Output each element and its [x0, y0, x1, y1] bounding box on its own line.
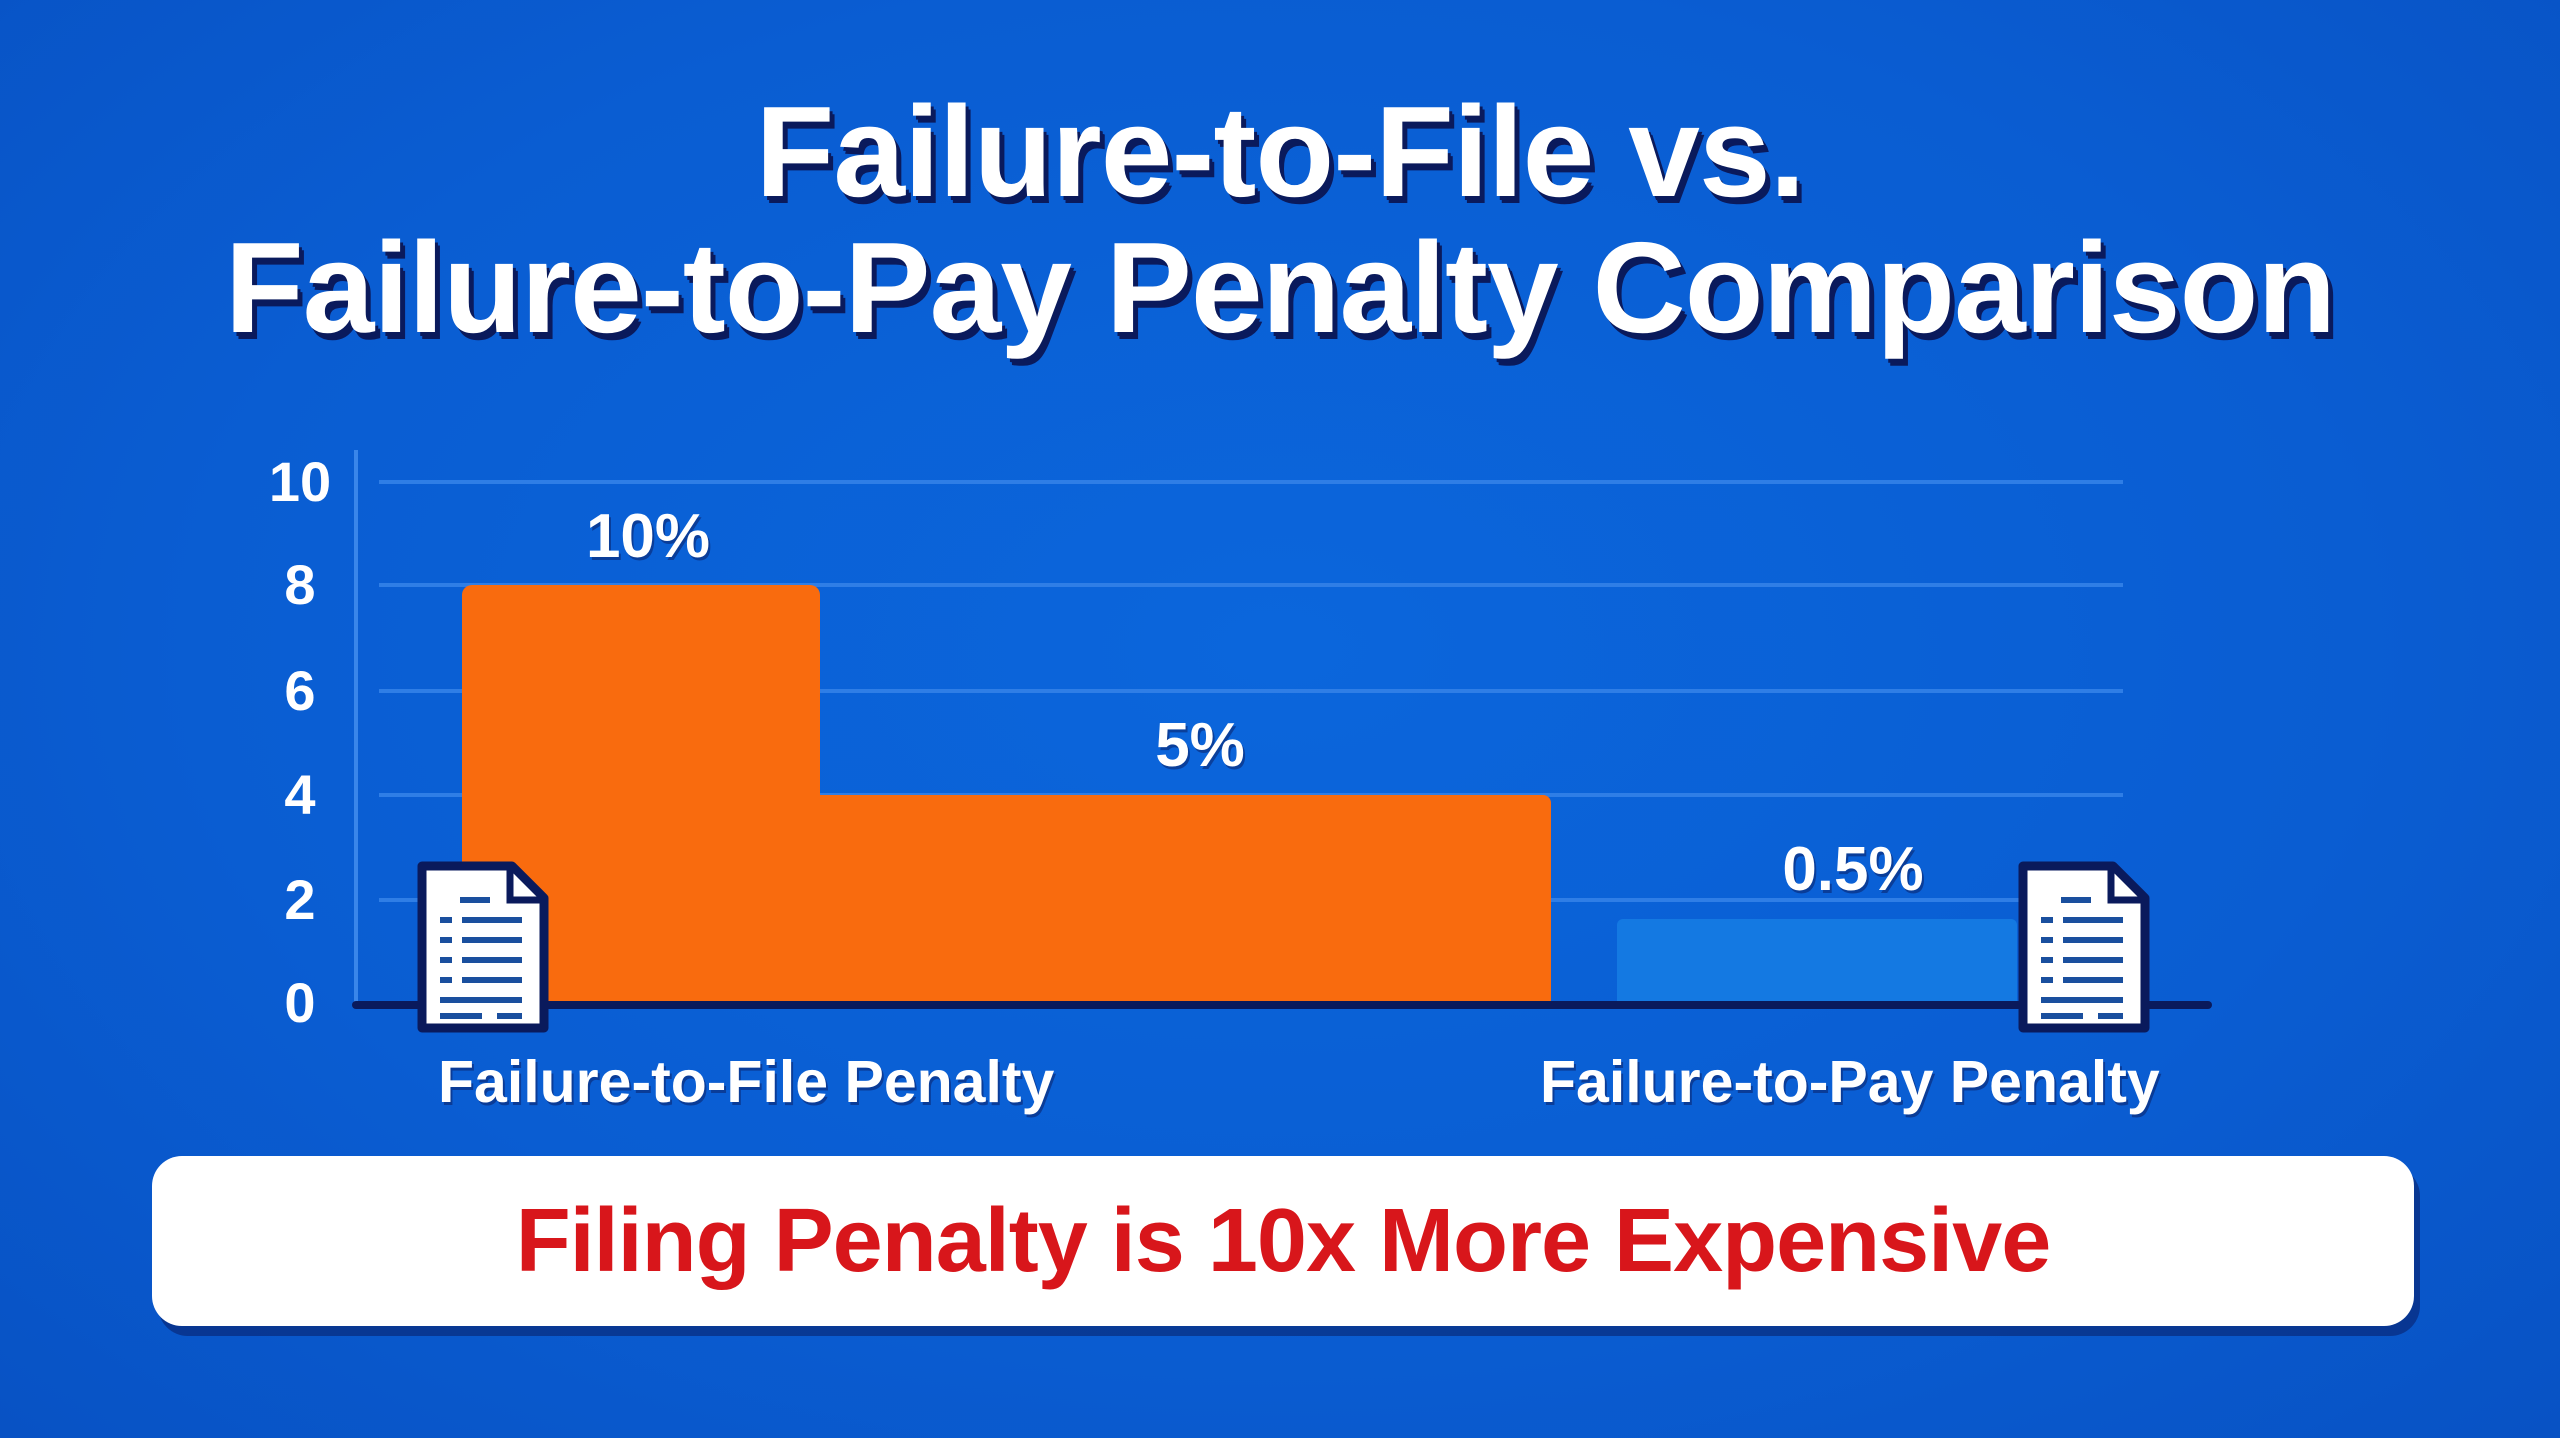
icon: document right	[2018, 862, 2150, 1032]
value label 10%: 10%	[586, 502, 710, 571]
y axis labels: 8	[284, 553, 316, 616]
title	[225, 80, 2335, 366]
y axis labels: 2	[284, 868, 316, 931]
chart	[269, 450, 2212, 1118]
y axis labels: 4	[284, 763, 316, 826]
callout banner	[152, 1156, 2414, 1326]
icon: document left	[418, 862, 548, 1032]
title: Failure-to-File vs.	[755, 80, 1805, 224]
y axis labels: 6	[284, 659, 316, 722]
value label 5%: 5%	[1155, 711, 1245, 780]
y axis labels: 10	[269, 450, 331, 513]
category label: failure-to-pay: Failure-to-Pay Penalty	[1540, 1049, 2160, 1115]
category label: failure-to-file: Failure-to-File Penalty	[438, 1049, 1054, 1115]
callout text: Filing Penalty is 10x More Expensive	[516, 1190, 2050, 1290]
y axis labels	[269, 450, 331, 1034]
bar: failure-to-file 10%	[462, 585, 820, 1005]
bar: failure-to-file 5%	[816, 795, 1551, 1005]
title: Failure-to-Pay Penalty Comparison	[225, 216, 2335, 360]
y axis labels: 0	[284, 971, 316, 1034]
bar: failure-to-pay 0.5%	[1617, 919, 2017, 1005]
baseline	[352, 1001, 2212, 1009]
value label 0.5%: 0.5%	[1782, 835, 1924, 904]
